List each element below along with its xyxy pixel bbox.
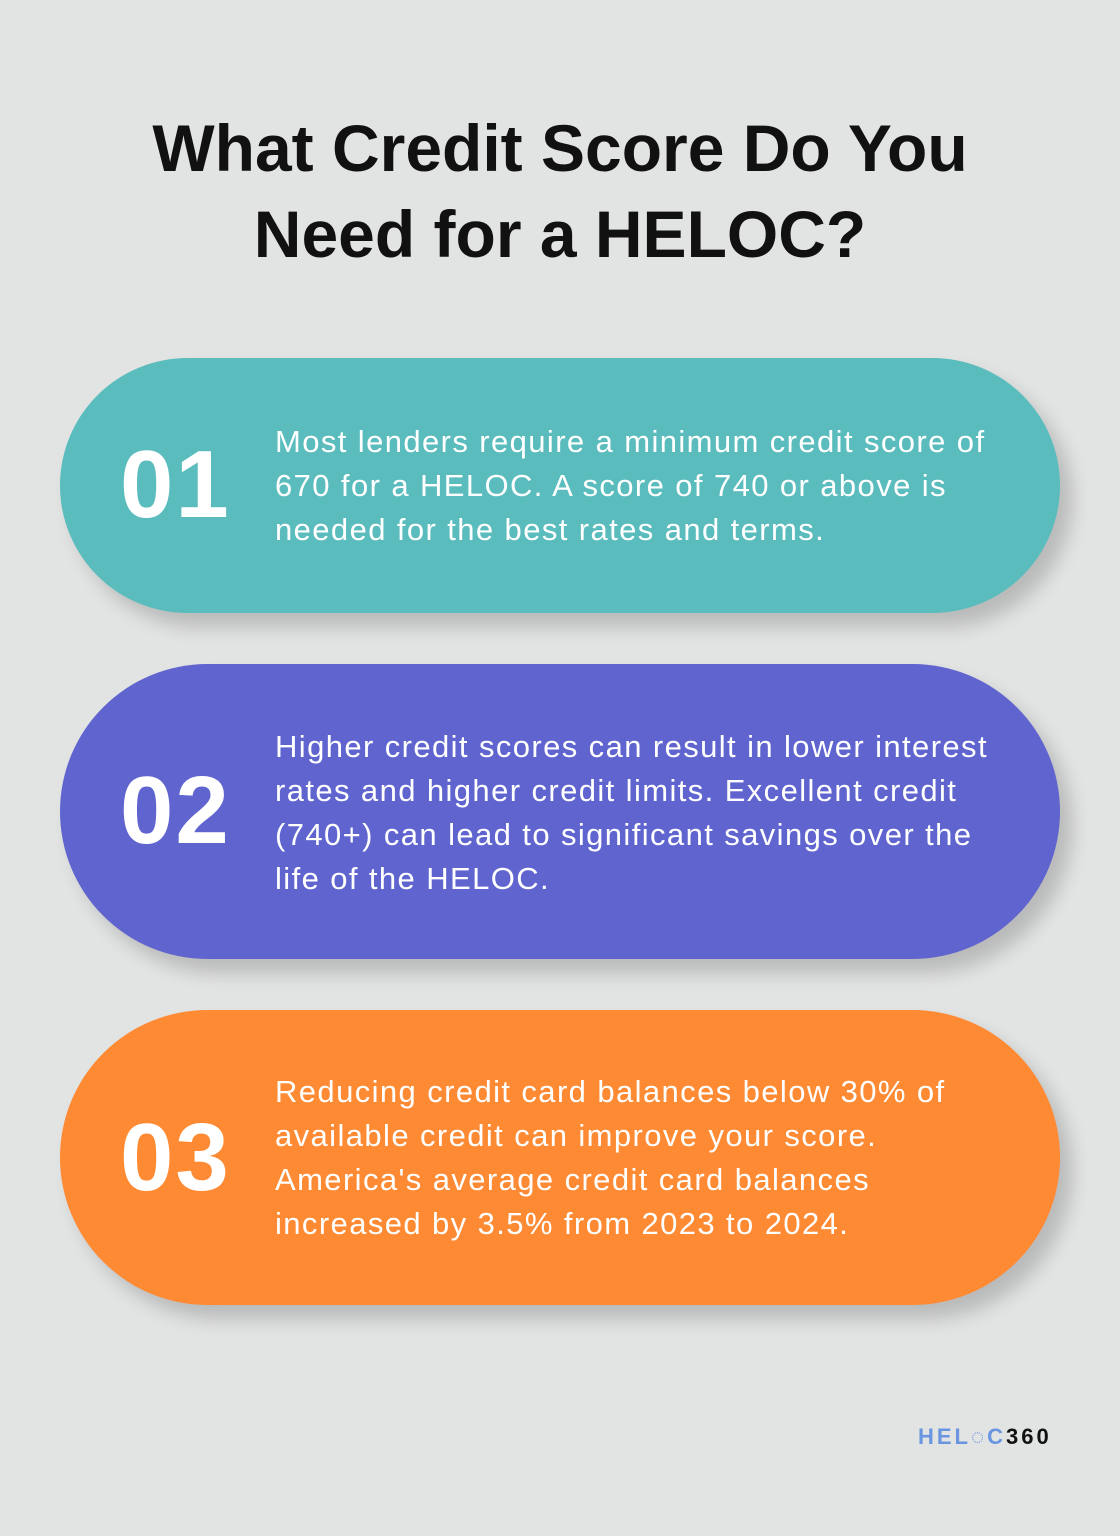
text 01: Most lenders require a minimum credit score of — [275, 424, 985, 459]
text 03 — [275, 1074, 946, 1241]
panel: card 01 — [60, 358, 1060, 613]
number 01: 01 — [120, 431, 231, 538]
text 02: life of the HELOC. — [275, 861, 550, 896]
title: Need for a HELOC? — [254, 197, 866, 271]
text 03: America's average credit card balances — [275, 1162, 870, 1197]
number 03: 03 — [120, 1104, 231, 1211]
text 02: rates and higher credit limits. Excellent credit — [275, 773, 957, 808]
text 02: Higher credit scores can result in lower interest — [275, 729, 988, 764]
text 01 — [275, 424, 985, 547]
text 03: increased by 3.5% from 2023 to 2024. — [275, 1206, 849, 1241]
text 01: 670 for a HELOC. A score of 740 or above is — [275, 468, 947, 503]
panel: card 03 — [60, 1010, 1060, 1305]
text 02 — [275, 729, 988, 896]
title: What Credit Score Do You — [152, 111, 968, 185]
text 01: needed for the best rates and terms. — [275, 512, 825, 547]
text 03: Reducing credit card balances below 30% of — [275, 1074, 946, 1109]
text 03: available credit can improve your score. — [275, 1118, 877, 1153]
number 02: 02 — [120, 757, 231, 864]
title — [152, 111, 968, 271]
text 02: (740+) can lead to significant savings over the — [275, 817, 972, 852]
panel: card 02 — [60, 664, 1060, 959]
logo: HEL◌C360 — [918, 1424, 1052, 1449]
